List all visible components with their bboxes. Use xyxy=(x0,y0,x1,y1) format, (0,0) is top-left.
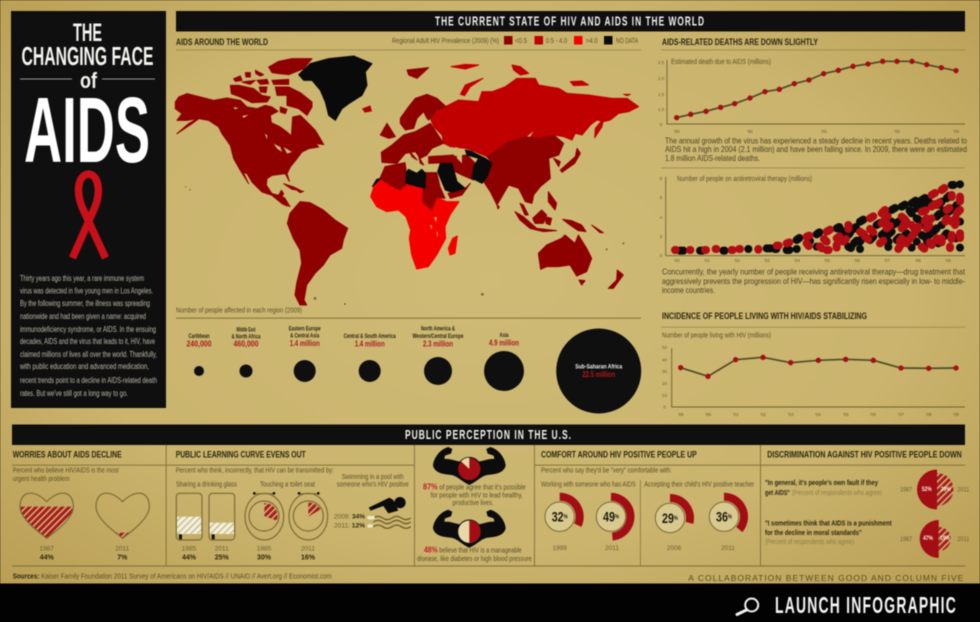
bubble: North America: Western/Central Europe xyxy=(412,334,464,340)
chart: half pies second statement: 47% xyxy=(923,535,933,542)
line chart: estimated deaths: '90 xyxy=(674,129,680,134)
bubble: Central and South America xyxy=(344,334,396,382)
panel: public learning curve: 2011 xyxy=(215,546,229,553)
intro text: immunodeficiency syndrome, or AIDS. In the ensuing xyxy=(20,325,156,334)
panel: comfort around HIV positive people: Working with someone who has AIDS xyxy=(541,482,636,489)
chart: dial 29 percent: 29% xyxy=(662,510,679,526)
icon: swimmer xyxy=(367,497,411,528)
chart: half pies second statement: 19% xyxy=(940,535,950,542)
text: therapy explanation: income countries. xyxy=(662,285,715,295)
panel: public learning curve: PUBLIC LEARNING CURVE EVENS OUT xyxy=(176,450,306,461)
chart: dial 49 percent: 49% xyxy=(603,508,620,524)
line chart: estimated deaths: '09 xyxy=(953,129,959,134)
icon: magnifier xyxy=(737,598,758,614)
bubble: Asia: 4.9 million xyxy=(489,338,519,348)
panel: comfort around HIV positive people: Percent who say they'd be "very" comfortable with: xyxy=(541,468,672,475)
chart: half pies first statement: 52% xyxy=(922,486,932,493)
panel: public learning curve: 2011: 12% xyxy=(334,523,365,530)
panel: comfort around HIV positive people: COMFORT AROUND HIV POSITIVE PEOPLE UP xyxy=(541,450,697,461)
map legend: <0.5 xyxy=(515,38,527,45)
pill chart: antiretroviral therapy: 6 xyxy=(660,195,663,200)
map: Africa, South America, Oceania xyxy=(280,163,624,305)
chart: half pies first statement xyxy=(917,470,954,510)
line chart: people living with HIV: '99 xyxy=(705,412,711,417)
intro text: rates. But we've still got a long way to go. xyxy=(20,389,128,398)
pill chart: antiretroviral therapy: '05 xyxy=(824,258,830,263)
panel: public learning curve: 1985 xyxy=(182,546,197,553)
line chart: people living with HIV: 30 xyxy=(662,369,667,374)
panel: public learning curve: 2011 xyxy=(301,546,315,553)
bubble: Middle East: Middle East xyxy=(236,328,256,334)
intro text: By the following summer, the illness was spreading xyxy=(20,299,150,308)
chart: half pies second statement xyxy=(920,520,951,558)
chart: dial 36 percent: 36% xyxy=(716,508,733,524)
panel: discrimination: (Percent of respondents who agree) xyxy=(765,539,854,546)
pill chart: antiretroviral therapy: '00 xyxy=(674,258,680,263)
panel: public learning curve: 2009: 34% xyxy=(334,513,365,520)
panel: worries about AIDS decline xyxy=(13,450,149,561)
panel: discrimination: 1987 xyxy=(900,487,912,494)
chart: dial 49 percent: 2011 xyxy=(605,545,619,552)
panel: muscle statistics: 87% of people agree that it's possible xyxy=(423,481,526,491)
panel: comfort around HIV positive people xyxy=(541,450,755,552)
chart: dial 32 percent xyxy=(545,497,580,552)
panel: public learning curve: someone who's HIV positive xyxy=(337,482,409,489)
bubble chart: people affected per region xyxy=(186,327,641,414)
title: AIDS xyxy=(24,78,150,182)
line chart: estimated deaths: 2.0 xyxy=(658,76,665,81)
line chart: people living with HIV: '06 xyxy=(870,412,876,417)
pill chart: antiretroviral therapy: '01 xyxy=(704,258,710,263)
icon: red ribbon xyxy=(72,174,106,258)
bubble: North America xyxy=(412,327,464,385)
panel: worries about AIDS decline: 44% xyxy=(40,554,54,561)
panel: public learning curve: Percent who think, incorrectly, that HIV can be transmitted by: xyxy=(176,468,334,475)
panel: discrimination: 2011 xyxy=(957,536,970,543)
line chart: people living with HIV: Number of people living with HIV (millions) xyxy=(662,333,771,340)
icon: muscle arms 48 percent xyxy=(433,510,506,548)
panel: discrimination xyxy=(765,450,970,558)
bubble: Sub-Saharan Africa xyxy=(556,328,641,414)
line chart: people living with HIV: '07 xyxy=(898,412,904,417)
panel: discrimination: "I sometimes think that AIDS is a punishment xyxy=(765,518,892,527)
line chart: people living with HIV: 0 xyxy=(663,404,666,410)
chart: dial 32 percent: 32% xyxy=(552,508,568,524)
chart: dial 49 percent xyxy=(596,497,630,552)
title: of xyxy=(80,68,98,93)
line chart: estimated deaths: 2.5 xyxy=(658,60,665,65)
bubble: Caribbean: Caribbean xyxy=(188,334,210,340)
panel: discrimination: 2011 xyxy=(957,487,970,494)
pill chart: antiretroviral therapy: '06 xyxy=(854,258,860,263)
pill chart: antiretroviral therapy: '08 xyxy=(915,258,921,263)
panel: worries about AIDS decline: Percent who believe HIV/AIDS is the most xyxy=(13,468,119,475)
line chart: people living with HIV: '09 xyxy=(953,412,959,417)
panel: discrimination: 1987 xyxy=(900,536,912,543)
chart: half pies first statement: 29% xyxy=(941,486,951,493)
panel: muscle statistics: 48% believe that HIV is a manageable xyxy=(424,544,522,554)
credit line: A COLLABORATION BETWEEN GOOD AND COLUMN FIVE xyxy=(688,573,964,583)
heading: AIDS around the world: AIDS AROUND THE WORLD xyxy=(176,37,268,48)
line chart: people living with HIV: '05 xyxy=(843,412,849,417)
text: deaths explanation: 1.8 million AIDS-related deaths. xyxy=(665,153,760,163)
section banner: public perception: PUBLIC PERCEPTION IN THE U.S. xyxy=(405,428,572,442)
pill chart: antiretroviral therapy: '09 xyxy=(945,258,951,263)
bubble: Central and South America: Central & South America xyxy=(344,334,396,340)
intro text: virus was detected in five young men in Los Angeles. xyxy=(20,286,153,296)
pill chart: antiretroviral therapy: Number of people on antiretroviral therapy (millions) xyxy=(677,176,812,183)
bubble: Eastern Europe: Eastern Europe xyxy=(289,327,321,333)
bubble: Middle East: 460,000 xyxy=(234,340,259,349)
sources: Sources: Kaiser Family Foundation 2011 Survey of Americans on HIV/AIDS // UNAID // Avert.org // Economist.com xyxy=(13,574,332,581)
line chart: people living with HIV: '98 xyxy=(678,412,684,417)
map legend: Regional Adult HIV Prevalence (2009) (%) xyxy=(392,38,499,45)
chart: dial 29 percent: 2006 xyxy=(667,545,682,552)
line chart: people living with HIV: '02 xyxy=(760,412,766,417)
chart: dial 36 percent: 2011 xyxy=(721,545,735,552)
panel: public learning curve: Touching a toilet seat xyxy=(260,482,315,489)
pill chart: antiretroviral therapy: 4 xyxy=(660,215,663,220)
title xyxy=(20,19,155,182)
text: therapy explanation xyxy=(662,267,966,295)
map: Eurasia xyxy=(380,64,639,209)
intro text xyxy=(19,274,157,398)
line chart: estimated deaths: '95 xyxy=(747,129,753,134)
panel: worries about AIDS decline: 7% xyxy=(117,554,128,561)
bubble: Eastern Europe: 1.4 million xyxy=(290,339,320,348)
pill chart: antiretroviral therapy: '03 xyxy=(764,258,770,263)
line chart: estimated deaths: 1.0 xyxy=(658,107,665,112)
line chart: estimated deaths: Estimated death due to AIDS (millions) xyxy=(671,59,771,66)
panel: public learning curve: 16% xyxy=(301,554,316,561)
left title panel xyxy=(11,11,166,408)
line chart: people living with HIV: '01 xyxy=(733,412,739,417)
panel: discrimination: "In general, it's people's own fault if they xyxy=(765,478,879,487)
intro text: with public education and advanced medication, xyxy=(19,362,149,371)
panel: muscle statistics xyxy=(417,447,532,563)
intro text: Thirty years ago this year, a rare immune system xyxy=(20,274,144,283)
pill chart: antiretroviral therapy: 2 xyxy=(660,234,663,239)
bubble: Eastern Europe: & Central Asia xyxy=(290,333,320,339)
pill chart: antiretroviral therapy: '04 xyxy=(794,258,800,263)
chart: dial 29 percent xyxy=(655,498,690,552)
panel: muscle statistics: disease, like diabetes or high blood pressure xyxy=(417,556,532,563)
line chart: estimated deaths: '00 xyxy=(821,129,827,134)
icon: drinking glasses xyxy=(176,493,235,540)
bubble: Caribbean xyxy=(186,334,212,376)
pill chart: antiretroviral therapy: '02 xyxy=(734,258,740,263)
panel: public learning curve: 1985 xyxy=(257,546,272,553)
panel: muscle statistics: productive lives. xyxy=(452,500,494,507)
panel: public learning curve: Swimming in a pool with xyxy=(342,474,404,481)
section banner: current state: THE CURRENT STATE OF HIV AND AIDS IN THE WORLD xyxy=(435,14,705,28)
bubble: Asia: Asia xyxy=(500,333,509,339)
bubble: Eastern Europe xyxy=(289,327,321,382)
line chart: estimated deaths: 1.5 xyxy=(658,92,665,97)
title: THE xyxy=(73,19,102,47)
panel: discrimination: (Percent of respondents who agree) xyxy=(792,490,882,497)
panel: discrimination: for the decline in moral standards" xyxy=(765,528,862,537)
line chart: people living with HIV xyxy=(662,333,965,417)
bubble: North America: 2.3 million xyxy=(423,340,453,349)
panel: worries about AIDS decline: 1987 xyxy=(39,546,54,553)
map: north America and Greenland xyxy=(175,56,372,206)
map legend: NO DATA xyxy=(616,38,638,45)
bubble: Middle East: & North Africa xyxy=(232,334,261,340)
icon: toilet seats xyxy=(245,492,328,540)
pill chart: antiretroviral therapy: '07 xyxy=(884,258,890,263)
line chart: people living with HIV: 40 xyxy=(662,358,667,362)
launch bar xyxy=(0,584,980,622)
line chart: people living with HIV: 10 xyxy=(662,393,667,398)
bubble: Central and South America: 1.4 million xyxy=(355,340,385,349)
intro text: recent trends point to a decline in AIDS-related death xyxy=(20,376,157,385)
bubble: Middle East xyxy=(232,328,261,378)
bubble: Caribbean: 240,000 xyxy=(186,340,212,349)
line chart: people living with HIV: 20 xyxy=(662,381,667,386)
icon: muscle arms 87 percent xyxy=(433,447,506,485)
panel: public learning curve: 25% xyxy=(215,554,229,561)
map legend xyxy=(392,36,638,45)
section banner: current state xyxy=(176,11,965,32)
chart: dial 32 percent: 1999 xyxy=(552,545,567,552)
line chart: estimated deaths xyxy=(658,59,965,134)
map legend: 0.5 - 4.0 xyxy=(546,38,567,45)
panel: worries about AIDS decline: urgent health problem xyxy=(13,476,70,483)
line chart: estimated deaths: 0 xyxy=(660,122,663,127)
panel: public learning curve: 44% xyxy=(182,554,197,561)
line chart: estimated deaths: '05 xyxy=(894,129,900,134)
text: deaths explanation xyxy=(665,135,967,163)
bubble: Sub-Saharan Africa: Sub-Saharan Africa xyxy=(575,364,623,370)
line chart: people living with HIV: '04 xyxy=(815,412,821,417)
line chart: people living with HIV: '03 xyxy=(788,412,794,417)
panel: worries about AIDS decline: WORRIES ABOUT AIDS DECLINE xyxy=(13,450,122,461)
bubble: North America: North America & xyxy=(421,327,455,333)
panel: muscle statistics: for people with HIV to lead healthy, xyxy=(431,492,523,499)
heading: incidence: INCIDENCE OF PEOPLE LIVING WITH HIV/AIDS STABILIZING xyxy=(662,311,867,322)
bubble: Asia xyxy=(484,333,524,391)
line chart: people living with HIV: '08 xyxy=(926,412,932,417)
icon: heart charts xyxy=(20,493,149,538)
chart: dial 36 percent xyxy=(709,497,744,552)
map legend: >4.0 xyxy=(586,38,598,45)
map caption: Number of people affected in each region (2009) xyxy=(176,308,302,315)
pill chart: antiretroviral therapy xyxy=(660,176,965,263)
heading: deaths: AIDS-RELATED DEATHS ARE DOWN SLIGHTLY xyxy=(662,37,818,48)
intro text: nationwide and had been given a name: acquired xyxy=(20,312,146,321)
pill chart: antiretroviral therapy: 8 xyxy=(660,176,663,181)
panel: public learning curve xyxy=(176,450,411,561)
title: CHANGING FACE xyxy=(22,41,154,71)
intro text: decades, AIDS and the virus that leads to it, HIV, have xyxy=(20,337,155,346)
panel: comfort around HIV positive people: Accepting their child's HIV positive teacher xyxy=(644,482,755,489)
line chart: people living with HIV: 50 xyxy=(662,345,667,350)
intro text: claimed millions of lives all over the world. Thankfully, xyxy=(20,350,157,359)
panel: public learning curve: 30% xyxy=(257,554,272,561)
pill chart: antiretroviral therapy: 0 xyxy=(660,253,663,258)
world map xyxy=(175,56,639,305)
bubble: Sub-Saharan Africa: 22.5 million xyxy=(582,370,615,379)
panel: discrimination: get AIDS" xyxy=(765,488,790,497)
section banner: public perception xyxy=(12,424,965,445)
panel: public learning curve: Sharing a drinking glass xyxy=(176,482,237,489)
panel: worries about AIDS decline: 2011 xyxy=(115,546,130,553)
